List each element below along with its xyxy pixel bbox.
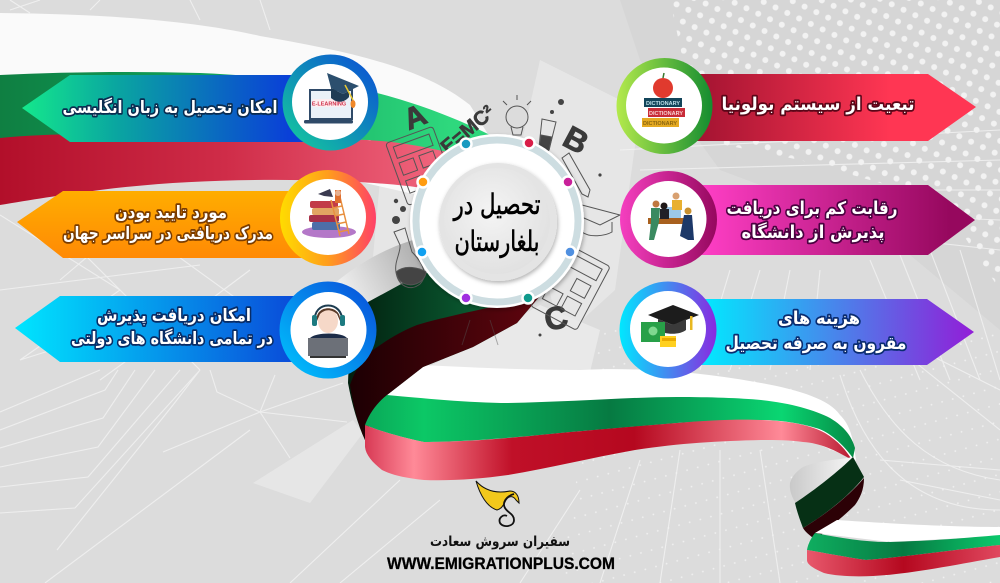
doodle: calculator right xyxy=(531,242,610,330)
panel: admission at all state universities xyxy=(15,282,376,378)
icon: dictionaries and apple: DICTIONARY xyxy=(643,121,677,127)
text: recognised degree: مدرک دریافتی در سراسر جهان xyxy=(63,224,273,244)
panel: affordable tuition xyxy=(620,282,974,378)
icon: dictionaries and apple: DICTIONARY xyxy=(646,101,680,107)
doodle: ink dots xyxy=(392,99,602,336)
lower flag ribbon xyxy=(335,238,1000,576)
centre: inner disk xyxy=(439,163,557,281)
centre: coloured nodes xyxy=(416,138,576,304)
doodle: test tube xyxy=(539,119,556,152)
doodle: letter A: A xyxy=(399,98,431,137)
ribbon: green stripe xyxy=(365,395,855,458)
doodle: calculator left xyxy=(386,126,455,206)
centre: title: تحصیل در xyxy=(452,188,540,221)
text: admission: امکان دریافت پذیرش xyxy=(97,306,251,326)
text: study in English: امکان تحصیل به زبان انگلیسی xyxy=(62,97,278,118)
ribbon: back fold xyxy=(790,457,858,505)
doodle: award ribbon xyxy=(462,320,498,345)
icon: books and ladder xyxy=(302,189,356,238)
text: low competition: رقابت کم برای دریافت xyxy=(726,199,898,219)
icon: e-learning laptop xyxy=(304,73,359,124)
doodle: light bulb xyxy=(503,95,531,135)
doodle: graduation cap xyxy=(570,205,620,236)
logo xyxy=(387,481,615,573)
doodle: letter C: C xyxy=(541,298,571,338)
icon: e-learning laptop: E-LEARNING xyxy=(312,102,346,108)
text: recognised degree xyxy=(63,203,273,244)
ribbon: red stripe xyxy=(365,420,852,480)
text: admission: در تمامی دانشگاه های دولتی xyxy=(71,328,273,349)
doodle: letter B: B xyxy=(557,119,595,161)
text: admission xyxy=(71,306,273,349)
icon: dictionaries and apple xyxy=(642,73,685,127)
doodle: pencil xyxy=(562,153,590,197)
ribbon: right tail xyxy=(815,520,1000,542)
text: website: WWW.EMIGRATIONPLUS.COM xyxy=(387,554,615,573)
panel: English-language study xyxy=(22,54,378,150)
icon: dictionaries and apple: DICTIONARY xyxy=(649,111,683,117)
text: tuition: مقرون به صرفه تحصیل xyxy=(726,334,906,354)
doodle: formula: E=MC² xyxy=(437,101,499,159)
ribbon: grey fold behind xyxy=(335,238,460,302)
text: recognised degree: مورد تایید بودن xyxy=(115,203,227,223)
panel: low competition xyxy=(620,171,975,268)
icon: team around a table xyxy=(648,192,694,240)
ribbon: white band xyxy=(380,365,856,460)
text: low competition xyxy=(726,199,898,243)
ribbon: dark underside xyxy=(348,255,545,440)
doodles: education sketches around the centre xyxy=(386,95,620,345)
text: Bologna: تبعیت از سیستم بولونیا xyxy=(722,94,914,115)
centre: title xyxy=(452,188,540,258)
panel: degree recognised worldwide xyxy=(17,170,376,266)
panel: Bologna system xyxy=(616,58,976,154)
text: low competition: پذیرش از دانشگاه xyxy=(742,222,884,243)
doodle: flask xyxy=(394,228,426,288)
icon: cap and money xyxy=(641,305,699,347)
text: company name: سفیران سروش سعادت xyxy=(430,534,570,550)
text: tuition: هزینه های xyxy=(778,309,860,329)
text: tuition xyxy=(726,309,906,354)
upper flag ribbon xyxy=(0,13,510,205)
centre: title: بلغارستان xyxy=(454,225,540,258)
icon: golden bird xyxy=(476,481,519,526)
centre circle xyxy=(410,134,584,308)
centre: outer ring xyxy=(410,134,584,308)
icon: support agent at laptop xyxy=(308,306,348,358)
